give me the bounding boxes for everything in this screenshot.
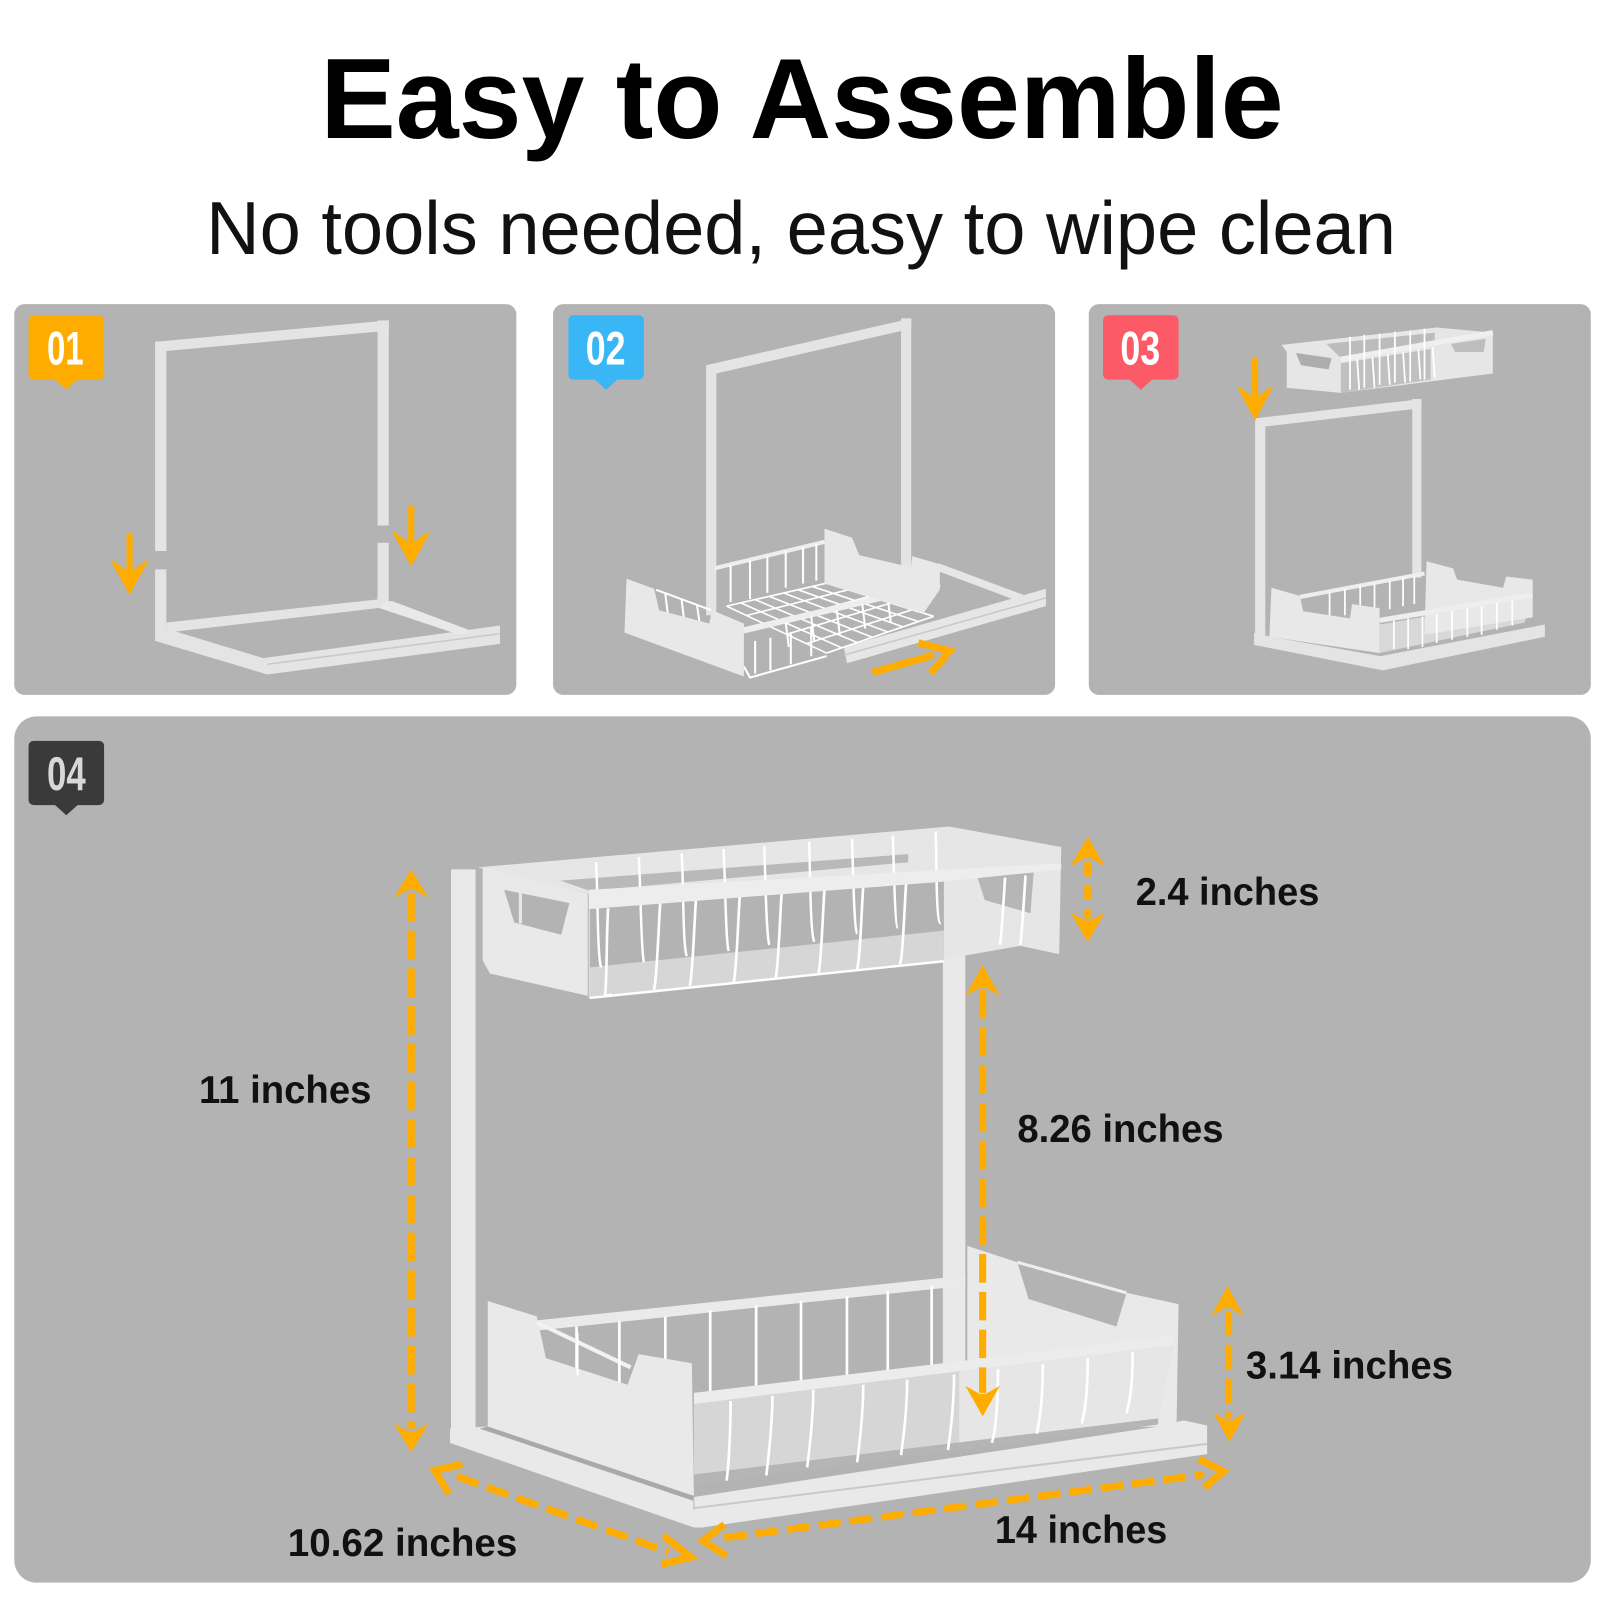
dimension: 8.26 inches [965,965,1223,1416]
panel: step 1 [14,304,516,695]
base rail: step 2 [844,563,1046,663]
badge: 04: 04 [47,748,86,800]
product: two tier organizer [450,827,1207,1528]
arrow: slide right [872,643,950,673]
lower basket [488,1246,1179,1497]
wire basket: step 2 [656,542,940,678]
badge: 02 [568,315,644,390]
frame: step 1 [155,320,500,674]
label: 3.14 inches: 3.14 inches [1246,1345,1453,1388]
frame: step 3 [1254,399,1545,670]
dimension: 11 inches [199,869,429,1452]
dimension: 2.4 inches [1070,837,1319,942]
lower basket: step 3 [1269,561,1533,653]
badge: 04 [29,741,104,815]
arrow: left down [112,535,147,593]
badge: 01: 01 [47,322,84,374]
panel: step 4 dimensions [14,716,1591,1583]
dimension: 10.62 inches [288,1464,691,1565]
subtitle: No tools needed, easy to wipe clean [206,187,1396,271]
label: 10.62 inches: 10.62 inches [288,1522,517,1565]
arrow: right down [394,507,429,564]
label: 11 inches: 11 inches [199,1069,371,1112]
label: 2.4 inches: 2.4 inches [1136,871,1319,914]
end panels: step 2 [624,529,940,677]
label: 8.26 inches: 8.26 inches [1017,1108,1223,1151]
rack posts [451,867,965,1443]
arrow: down to frame [1239,359,1271,418]
label: 14 inches: 14 inches [995,1509,1167,1552]
upper basket [478,827,1061,998]
badge: 03 [1103,315,1179,390]
panel: step 2 [553,304,1055,695]
frame: step 2 [706,318,911,615]
dimension: 14 inches [703,1459,1223,1556]
upper basket: step 3 [1282,328,1493,393]
title: Easy to Assemble [320,36,1284,163]
base tray [450,1420,1207,1528]
panel: step 3 [1089,304,1591,695]
dimension: 3.14 inches [1211,1286,1453,1442]
badge: 03: 03 [1120,322,1160,374]
badge: 02: 02 [586,322,626,374]
badge: 01 [29,315,104,390]
